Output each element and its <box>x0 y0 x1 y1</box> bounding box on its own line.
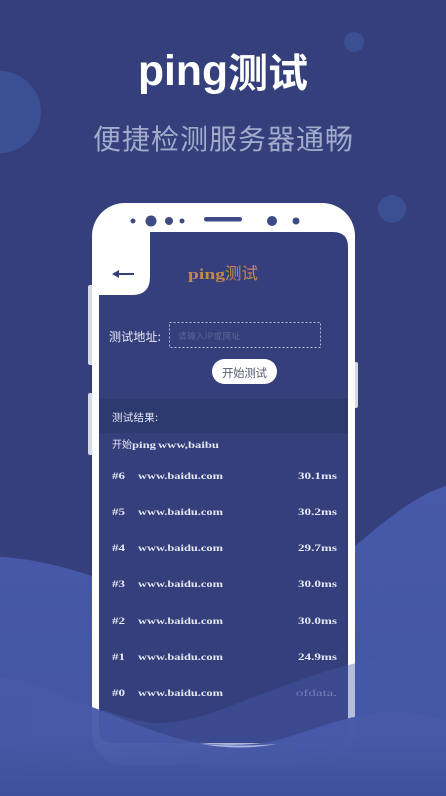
decorative circle middle right <box>378 195 406 223</box>
left side button upper <box>88 285 94 365</box>
decorative circle left <box>0 71 41 153</box>
camera and sensor dots <box>130 216 300 226</box>
title: ping <box>138 47 228 95</box>
screen title: ping <box>188 267 226 283</box>
title: 测试 <box>228 41 308 99</box>
result row 0: www.baidu.com <box>138 689 223 699</box>
result row 5: 30.2ms <box>298 508 337 518</box>
result row 0: #0 <box>112 689 125 699</box>
result row 1 <box>112 653 337 663</box>
result row 0 <box>112 688 337 699</box>
result row 6: #6 <box>112 472 125 482</box>
result row 3 <box>112 580 337 590</box>
result row 3: #3 <box>112 580 125 590</box>
input placeholder: 请输入IP或网址 <box>178 330 240 342</box>
result row 3: 30.0ms <box>298 580 337 590</box>
result row 4 <box>112 544 337 554</box>
result row 4: www.baidu.com <box>138 544 223 554</box>
result row 2 <box>112 617 337 627</box>
ping start line: www,baibu <box>158 441 220 451</box>
decorative circle top right <box>344 32 364 52</box>
subtitle: 便捷检测服务器通畅 <box>93 118 353 158</box>
back arrow icon <box>112 270 134 278</box>
result row 2: www.baidu.com <box>138 617 223 627</box>
right side button <box>352 362 358 408</box>
result row 5 <box>112 508 337 518</box>
phone body <box>92 203 355 766</box>
front opaque wave <box>0 678 446 796</box>
ping start line: ping <box>132 441 156 451</box>
result row 5: www.baidu.com <box>138 508 223 518</box>
title <box>138 41 308 99</box>
results header bar: 测试结果: <box>112 410 158 425</box>
ping start line <box>112 436 220 451</box>
address label: 测试地址: <box>109 328 161 345</box>
result row 4: 29.7ms <box>298 544 337 554</box>
address input <box>170 322 320 348</box>
result row 3: www.baidu.com <box>138 580 223 590</box>
screen title: 测试 <box>225 260 258 284</box>
ping start line: 开始 <box>112 436 132 451</box>
result row 5: #5 <box>112 508 125 518</box>
result row 1: #1 <box>112 653 125 663</box>
home indicator highlight <box>201 744 277 748</box>
start button: 开始测试 <box>222 365 268 381</box>
result row 6: www.baidu.com <box>138 472 223 482</box>
screen <box>99 232 348 743</box>
bottom shade <box>0 736 446 796</box>
result row 2: #2 <box>112 617 125 627</box>
phone mockup <box>88 203 358 766</box>
result row 2: 30.0ms <box>298 617 337 627</box>
result row 6: 30.1ms <box>298 472 337 482</box>
result row 4: #4 <box>112 544 125 554</box>
result row 1: 24.9ms <box>298 653 337 663</box>
results header bar <box>99 399 348 433</box>
start button <box>212 359 277 384</box>
result row 6 <box>112 472 337 482</box>
result row 0: ofdata. <box>296 688 337 699</box>
left side button lower <box>88 393 94 455</box>
background wave <box>0 486 446 796</box>
result row 1: www.baidu.com <box>138 653 223 663</box>
front translucent wave <box>92 653 446 796</box>
screen title <box>188 260 258 284</box>
